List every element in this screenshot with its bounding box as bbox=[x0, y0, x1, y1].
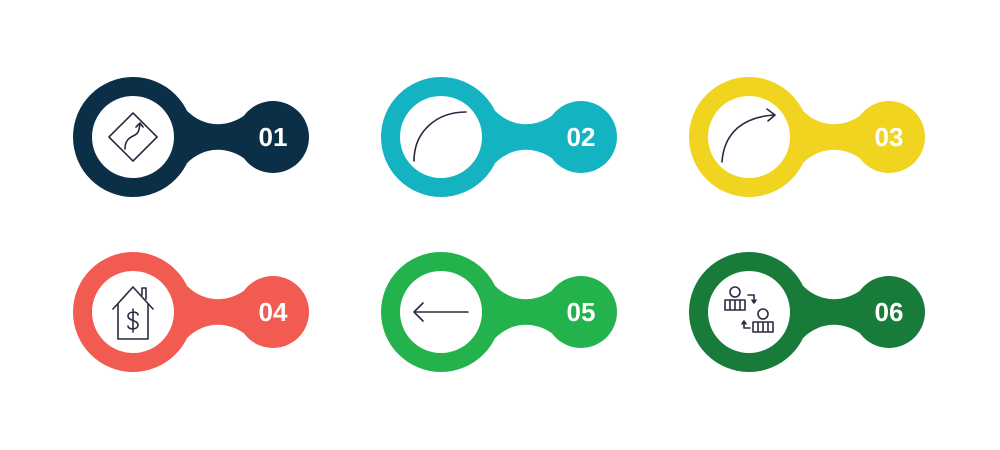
item 06 bbox=[689, 252, 925, 372]
item 02 bbox=[381, 77, 617, 197]
item 05 bbox=[381, 252, 617, 372]
number 04: 04 bbox=[259, 297, 288, 327]
icon: arc bbox=[414, 112, 466, 161]
number 05: 05 bbox=[567, 297, 595, 327]
icon: people exchange bbox=[725, 287, 773, 332]
icon: left arrow bbox=[414, 303, 468, 321]
item 01 bbox=[73, 77, 309, 197]
number 06: 06 bbox=[875, 297, 903, 327]
number 02: 02 bbox=[567, 122, 595, 152]
icon: house with dollar bbox=[113, 287, 153, 339]
number 03: 03 bbox=[875, 122, 903, 152]
icon: curved arrow bbox=[722, 109, 775, 162]
item 04 bbox=[73, 252, 309, 372]
item 03 bbox=[689, 77, 925, 197]
icon: winding road sign bbox=[109, 113, 157, 161]
number 01: 01 bbox=[259, 122, 287, 152]
